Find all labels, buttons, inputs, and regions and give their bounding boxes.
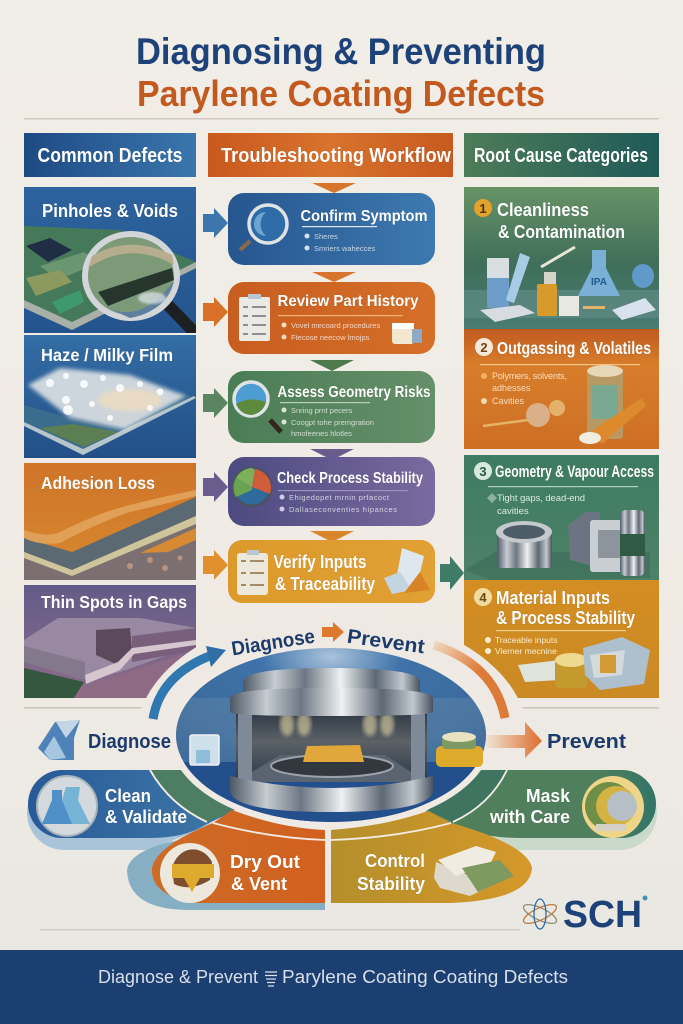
parylene coating chamber <box>176 648 486 824</box>
icon: pie gauge <box>233 468 271 506</box>
panel: pinholes and voids: Pinholes & Voids <box>42 201 178 221</box>
panel: outgassing and volatiles: Cavities <box>492 396 525 406</box>
workflow step: confirm symptom: Confirm Symptom <box>300 208 428 225</box>
arrow: green to assess geometry <box>203 388 228 418</box>
prevent label: Prevent <box>547 731 626 753</box>
panel: cleanliness and contamination: Cleanliness <box>497 200 589 220</box>
workflow step: assess geometry risks <box>228 360 435 443</box>
panel: cleanliness and contamination: & Contamination <box>498 222 625 242</box>
panel: haze / milky film <box>24 335 196 458</box>
icon: glass beaker <box>190 735 219 765</box>
panel: geometry and vapour access <box>464 455 659 580</box>
workflow step: review part history: Vovel mecoard procedures <box>291 321 380 330</box>
icon: checklist <box>237 550 268 595</box>
workflow step: check process stability: Dallaseconventies hipances <box>289 505 397 514</box>
logo: SCH <box>521 894 648 936</box>
panel: material inputs and process stability <box>464 580 659 698</box>
logo: SCH: SCH <box>563 894 642 936</box>
badge 4 <box>474 588 492 606</box>
icon: lab bench with IPA flask: IPA <box>591 277 607 288</box>
workflow step: assess geometry risks: Coogpt tohe premgration <box>291 418 374 427</box>
header: root cause categories <box>464 133 659 177</box>
chamber top cap <box>243 668 420 693</box>
pill: clean and validate: & Validate <box>105 807 187 827</box>
footer band <box>0 950 683 1024</box>
badge 3 <box>474 462 492 480</box>
title <box>136 31 546 114</box>
pill: dry out and vent: & Vent <box>231 874 287 894</box>
panel: adhesion loss <box>24 463 196 580</box>
panel: outgassing and volatiles: Outgassing & Volatiles <box>497 338 651 358</box>
chamber body <box>236 712 427 782</box>
panel: geometry and vapour access: cavities <box>497 506 529 517</box>
workflow step: review part history: Review Part History <box>278 293 419 310</box>
title: Diagnosing & Preventing <box>136 31 546 72</box>
header: common defects <box>24 133 196 177</box>
heading: diagnose to prevent arc: Prevent <box>346 626 426 658</box>
workflow step: assess geometry risks: Assess Geometry Risks <box>278 384 431 401</box>
diagnose label <box>38 720 171 760</box>
workflow step: check process stability: Check Process Stability <box>277 470 423 487</box>
icon: magnifying glass <box>85 234 197 335</box>
workflow step: verify inputs and traceability: & Traceability <box>275 574 375 594</box>
pill: clean and validate <box>27 770 235 850</box>
footer band: Parylene Coating Coating Defects <box>282 966 568 987</box>
arrow: blue to confirm symptom <box>203 208 228 238</box>
panel: material inputs and process stability: & Process Stability <box>496 608 635 628</box>
workflow step: check process stability <box>228 449 435 526</box>
badge 1: 1 <box>479 201 487 216</box>
arrow: purple to check stability <box>203 472 228 502</box>
panel: outgassing and volatiles <box>464 329 659 449</box>
icon: diagnose crystal <box>38 720 80 760</box>
icon: paper stack <box>434 846 514 896</box>
icon: lab bench with IPA flask <box>464 247 659 322</box>
header: troubleshooting workflow <box>208 133 453 177</box>
divider band behind diagnose row <box>24 708 659 770</box>
panel: adhesion loss: Adhesion Loss <box>41 473 155 493</box>
arrow: amber to verify inputs <box>203 550 228 580</box>
workflow step: confirm symptom: Smriers wahecces <box>314 244 376 253</box>
icon: flasks <box>37 776 97 836</box>
workflow step: confirm symptom: Sheres <box>314 232 338 241</box>
icon: peeling layers <box>24 490 196 580</box>
pill: control stability: Control <box>365 851 425 871</box>
badge 3: 3 <box>479 464 487 479</box>
icon: chamber and vacuum unit <box>465 510 650 580</box>
workflow step: verify inputs and traceability <box>228 531 435 603</box>
workflow step: assess geometry risks: Snring prnt pecers <box>291 406 353 415</box>
panel: thin spots in gaps: Thin Spots in Gaps <box>41 592 187 612</box>
workflow step: confirm symptom <box>228 183 435 265</box>
workflow step: verify inputs and traceability: Verify Inputs <box>274 552 366 572</box>
panel: thin spots in gaps <box>24 585 196 698</box>
pill: dry out and vent <box>127 810 325 910</box>
panel: material inputs and process stability: Traceable inputs <box>495 635 558 645</box>
pill: mask with care <box>425 770 657 850</box>
icon: documents and blocks <box>384 548 430 594</box>
footer band: Diagnose & Prevent <box>98 966 258 987</box>
icon: stepped block with thin coating <box>24 618 196 698</box>
icon: masking tape <box>582 776 644 838</box>
workflow step: assess geometry risks: hmofeenes hlotles <box>291 429 352 438</box>
workflow step: review part history <box>228 272 435 354</box>
central halo <box>136 612 528 864</box>
panel: geometry and vapour access: Tight gaps, dead-end <box>497 493 585 504</box>
pill: mask with care: Mask <box>526 786 571 806</box>
pill: control stability <box>331 811 532 903</box>
panel: material inputs and process stability: Vierner mecnine <box>495 646 557 656</box>
badge 4: 4 <box>479 590 487 605</box>
panel: haze / milky film: Haze / Milky Film <box>41 345 173 365</box>
pill: clean and validate: Clean <box>105 786 151 806</box>
arrow: workflow to root causes <box>440 556 464 590</box>
icon: amber container <box>436 732 483 767</box>
chamber base ring <box>230 776 433 812</box>
badge 1 <box>474 199 492 217</box>
icon: oven <box>160 843 220 903</box>
diagnose label: Diagnose <box>88 731 171 753</box>
workflow step: review part history: Ftecose neecow lmojps <box>291 333 370 342</box>
icon: jar, bulb and brush <box>483 365 646 444</box>
icon: circuit board <box>24 226 196 330</box>
panel: outgassing and volatiles: adhesses <box>492 383 531 393</box>
icon: magnifier <box>240 205 287 250</box>
icon: part sample <box>392 323 422 344</box>
arrow: orange to review history <box>203 297 228 327</box>
icon: atom mark <box>521 899 559 929</box>
panel: cleanliness and contamination <box>464 187 659 329</box>
panel: pinholes and voids <box>24 187 197 335</box>
heading: diagnose to prevent arc <box>230 622 426 660</box>
icon: checklist clipboard <box>239 294 270 341</box>
icon: hazy coated plate <box>24 368 196 455</box>
header: common defects: Common Defects <box>38 145 182 167</box>
panel: material inputs and process stability: Material Inputs <box>496 588 610 608</box>
arrow: curved diagnose arrow <box>153 646 226 719</box>
icon: landscape magnifier <box>234 382 281 432</box>
icon: samples and box <box>518 637 650 690</box>
title: Parylene Coating Defects <box>137 73 545 114</box>
pill: control stability: Stability <box>357 874 425 894</box>
central rim <box>169 642 493 828</box>
pill: mask with care: with Care <box>489 807 570 827</box>
heading: diagnose to prevent arc: Diagnose <box>230 626 316 660</box>
pill: dry out and vent: Dry Out <box>230 852 300 872</box>
badge 2: 2 <box>480 340 488 355</box>
panel: outgassing and volatiles: Polymers, solvents, <box>492 371 567 381</box>
arrow: sweep to prevent <box>486 722 542 758</box>
workflow step: check process stability: Ehigedopet mrnin prfacoct <box>289 493 390 502</box>
badge 2 <box>475 338 493 356</box>
arrow: curved prevent arrow <box>434 645 505 718</box>
header: troubleshooting workflow: Troubleshooting Workflow <box>221 145 451 167</box>
